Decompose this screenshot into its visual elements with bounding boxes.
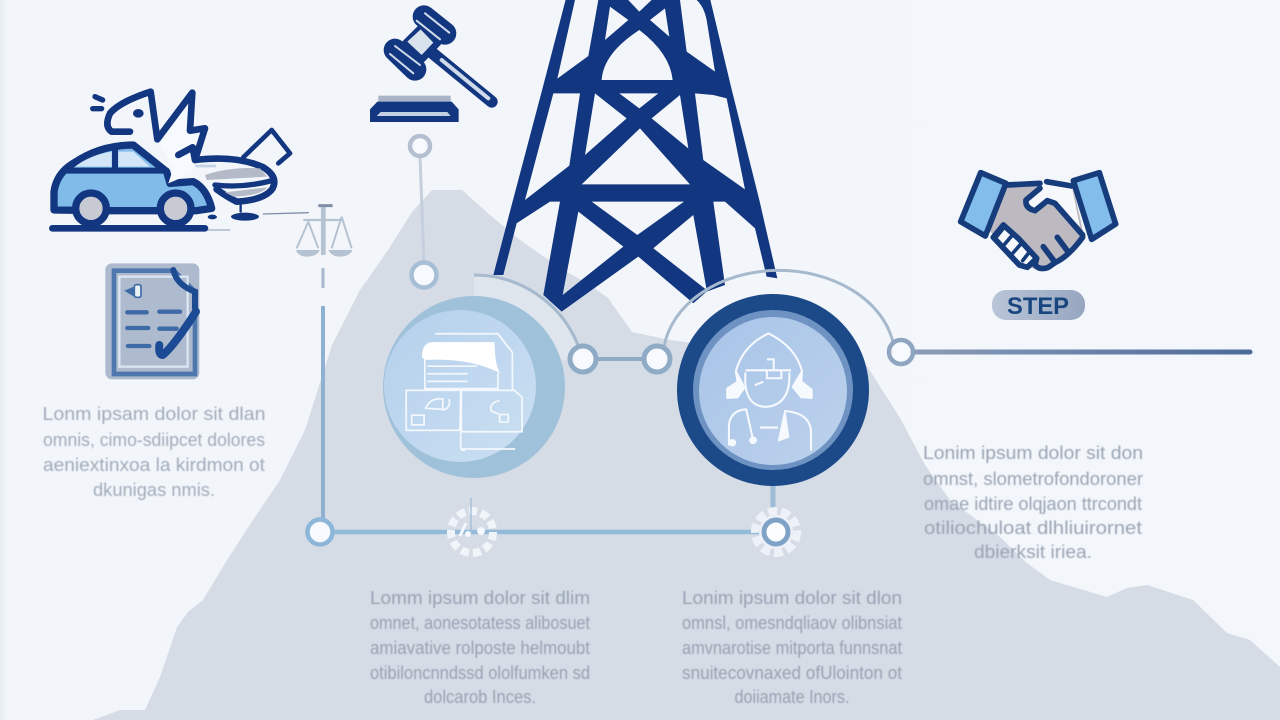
text block: right: Lonim ipsum dolor sit don	[923, 443, 1143, 463]
icon: car crash	[52, 92, 308, 230]
impact burst	[158, 93, 205, 183]
text block: left: aeniextinxoa la kirdmon ot	[43, 455, 265, 475]
halo: left crescent	[474, 275, 583, 360]
text block: left	[42, 404, 266, 500]
icon: right gear	[755, 511, 797, 553]
icon: handshake	[961, 173, 1116, 269]
debris	[208, 215, 217, 219]
text block: bottom right: omnsl, omesndqliaov olibnsiat	[682, 613, 902, 633]
icon: left gear	[451, 498, 493, 553]
car body	[54, 145, 212, 211]
icon: worker	[727, 333, 812, 451]
text block: right: omnst, slometrofondoroner	[923, 469, 1143, 489]
connector arcs	[474, 270, 893, 347]
step label: STEP	[1007, 293, 1069, 320]
text block: right: dbierksit iriea.	[974, 542, 1092, 562]
text block: bottom right: snuitecovnaxed ofUlointon ot	[682, 663, 902, 683]
icon: gavel	[370, 13, 492, 122]
connector lines	[323, 156, 1250, 532]
crashed car	[195, 159, 274, 202]
text block: bottom centre: Lomm ipsum dolor sit dlim	[370, 588, 590, 608]
text block: bottom right	[682, 588, 902, 707]
text block: bottom centre: omnet, aonesotatess alibosuet	[370, 613, 590, 633]
text block: bottom centre: amiavative rolposte helmoubt	[370, 638, 590, 658]
text block: left: Lonm ipsam dolor sit dlan	[42, 404, 266, 424]
connector nodes	[308, 136, 913, 544]
text block: left: omnis, cimo-sdiipcet dolores	[43, 430, 265, 450]
text block: bottom right: Lonim ipsum dolor sit dlon	[682, 588, 902, 608]
mountain silhouette	[93, 190, 1280, 720]
text block: bottom centre	[370, 588, 590, 707]
step label	[992, 290, 1085, 320]
text block: right: otiliochuloat dlhliuirornet	[924, 518, 1142, 538]
text block: right	[923, 443, 1143, 562]
step circle: worker	[677, 294, 869, 486]
text block: bottom centre: dolcarob Inces.	[424, 687, 536, 707]
text block: left: dkunigas nmis.	[93, 480, 215, 500]
icon: checklist document	[105, 263, 199, 379]
text block: bottom right: amvnarotise mitporta funnsnat	[682, 638, 902, 658]
icon: documents	[406, 334, 522, 451]
text block: bottom centre: otibiloncnndssd ololfumken sd	[370, 663, 590, 683]
transmission tower	[493, 0, 777, 312]
text block: right: omae idtire olqjaon ttrcondt	[924, 494, 1142, 514]
icon: scales	[296, 206, 353, 257]
step circle: documents	[383, 296, 565, 478]
text block: bottom right: doiiamate Inors.	[734, 687, 850, 707]
